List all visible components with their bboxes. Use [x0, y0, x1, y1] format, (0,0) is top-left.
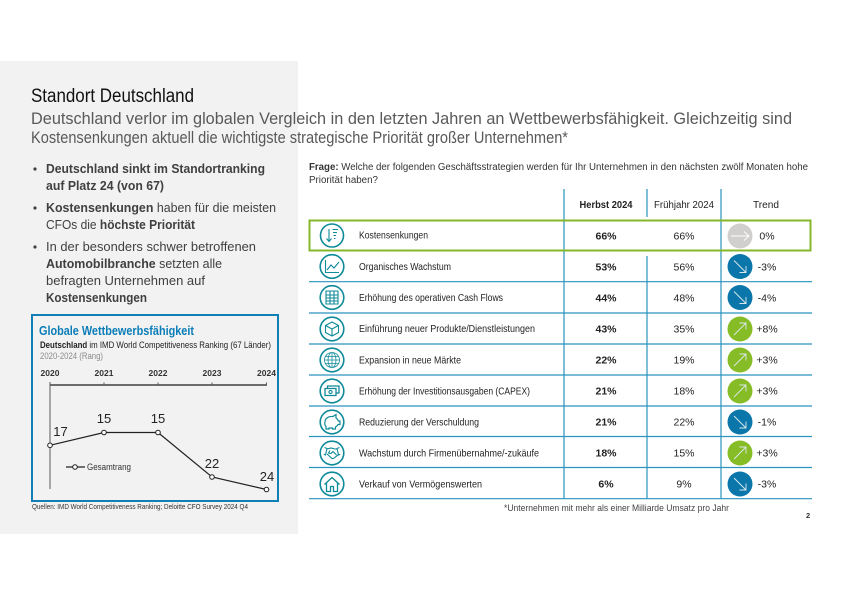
- bullet list: Kostensenkungen: [46, 290, 147, 305]
- trend arrow: down: [728, 254, 752, 279]
- year labels: 2022: [149, 368, 168, 378]
- trend arrow: neutral: [728, 224, 752, 248]
- row: Expansion in neue Märkte: Expansion in neue Märkte: [359, 354, 461, 366]
- subtitle: Deutschland verlor im globalen Vergleich in den letzten Jahren an Wettbewerbsfähigkeit. Gleichzeitig sind: [31, 110, 792, 128]
- table header: Frühjahr 2024: [654, 200, 714, 211]
- row: Einführung neuer Produkte/Dienstleistungen: 43%: [595, 324, 617, 336]
- title: Standort Deutschland: [31, 86, 194, 107]
- row: Erhöhung des operativen Cash Flows: 48%: [673, 292, 695, 304]
- trend arrow: down: [728, 285, 752, 310]
- icon: piggy bank: [320, 410, 344, 434]
- icon: house: [320, 472, 344, 496]
- row: Expansion in neue Märkte: 19%: [673, 354, 695, 366]
- data values: [53, 411, 274, 484]
- row: Kostensenkungen: 66%: [595, 230, 617, 242]
- data values: 24: [260, 469, 274, 484]
- row: Erhöhung der Investitionsausgaben (CAPEX): Erhöhung der Investitionsausgaben (CAPEX): [359, 386, 530, 398]
- icon: falling list: [320, 224, 344, 247]
- chart heading: Globale Wettbewerbsfähigkeit: [39, 323, 195, 338]
- row: Verkauf von Vermögenswerten: -3%: [758, 478, 776, 490]
- year labels: 2024: [257, 368, 276, 378]
- year labels: [41, 368, 276, 378]
- row: Erhöhung des operativen Cash Flows: -4%: [758, 292, 776, 304]
- footnote: *Unternehmen mit mehr als einer Milliarde Umsatz pro Jahr: [504, 503, 729, 514]
- row: Verkauf von Vermögenswerten: 9%: [676, 478, 692, 490]
- panel: Globale Wettbewerbsfähigkeit chart: [32, 315, 278, 501]
- trend arrow: down: [728, 472, 752, 496]
- year labels: 2021: [95, 368, 114, 378]
- row: Organisches Wachstum: 53%: [595, 262, 617, 274]
- row: Reduzierung der Verschuldung: 21%: [595, 416, 617, 428]
- row: Wachstum durch Firmenübernahme/-zukäufe: 18%: [595, 448, 617, 460]
- row: Expansion in neue Märkte: +3%: [756, 354, 778, 366]
- row: Organisches Wachstum: [320, 254, 776, 279]
- legend: [66, 462, 131, 472]
- row: Organisches Wachstum: 56%: [673, 262, 695, 274]
- table header: [580, 200, 779, 211]
- icon: globe: [320, 348, 344, 372]
- row: Kostensenkungen: Kostensenkungen: [359, 230, 428, 242]
- subtitle: [31, 110, 792, 147]
- table header: Herbst 2024: [580, 200, 633, 211]
- chart subtitle: Deutschland im IMD World Competitiveness Ranking (67 Länder): [40, 340, 271, 351]
- question text: [309, 162, 808, 186]
- trend arrow: up: [728, 316, 752, 342]
- row: Wachstum durch Firmenübernahme/-zukäufe: 15%: [673, 448, 695, 460]
- axes: [50, 382, 267, 489]
- bullet list: auf Platz 24 (von 67): [46, 178, 164, 193]
- trend arrow: up: [728, 440, 752, 466]
- legend: Gesamtrang: [87, 462, 131, 472]
- row: Organisches Wachstum: -3%: [758, 262, 776, 274]
- icon: handshake: [320, 441, 344, 465]
- row: Erhöhung der Investitionsausgaben (CAPEX): 21%: [595, 386, 617, 398]
- question text: Priorität haben?: [309, 175, 378, 186]
- data values: 15: [97, 411, 111, 426]
- bullet list: In der besonders schwer betroffenen: [46, 239, 256, 254]
- row: Erhöhung des operativen Cash Flows: 44%: [595, 292, 617, 304]
- row: Expansion in neue Märkte: [320, 348, 778, 372]
- year labels: 2020: [41, 368, 60, 378]
- row: Kostensenkungen: 0%: [759, 230, 775, 242]
- row: Reduzierung der Verschuldung: 22%: [673, 416, 695, 428]
- row: Verkauf von Vermögenswerten: [320, 472, 776, 496]
- data values: 22: [205, 456, 219, 471]
- row: Erhöhung der Investitionsausgaben (CAPEX): +3%: [756, 386, 778, 398]
- row: Wachstum durch Firmenübernahme/-zukäufe: Wachstum durch Firmenübernahme/-zukäufe: [359, 448, 539, 460]
- source note: Quellen: IMD World Competitiveness Ranking; Deloitte CFO Survey 2024 Q4: [32, 502, 248, 511]
- year labels: 2023: [203, 368, 222, 378]
- icon: abacus: [320, 286, 344, 309]
- subtitle: Kostensenkungen aktuell die wichtigste strategische Priorität großer Unternehmen*: [31, 129, 568, 147]
- icon: line chart: [320, 255, 344, 278]
- bullet list: Deutschland sinkt im Standortranking: [46, 161, 265, 176]
- icon: cube: [320, 317, 344, 341]
- icon: banknotes: [320, 379, 344, 403]
- row: Erhöhung der Investitionsausgaben (CAPEX): 18%: [673, 386, 695, 398]
- page number: 2: [806, 511, 810, 520]
- question text: Frage: Welche der folgenden Geschäftsstrategien werden für Ihr Unternehmen in den nächsten zwölf Monaten hohe: [309, 162, 808, 173]
- row: Einführung neuer Produkte/Dienstleistungen: 35%: [673, 324, 695, 336]
- highlight box: top row: [310, 220, 810, 250]
- row: Erhöhung des operativen Cash Flows: [320, 285, 776, 310]
- row: Verkauf von Vermögenswerten: Verkauf von Vermögenswerten: [359, 478, 482, 490]
- trend arrow: up: [728, 348, 752, 372]
- row: Reduzierung der Verschuldung: [320, 410, 776, 434]
- bullet list: befragten Unternehmen auf: [46, 273, 205, 288]
- row: Einführung neuer Produkte/Dienstleistungen: [320, 316, 778, 342]
- trend arrow: up: [728, 378, 752, 404]
- bullet list: CFOs die höchste Priorität: [46, 217, 196, 232]
- bullet list: [33, 161, 276, 305]
- table grid: [309, 189, 812, 499]
- bullet list: Kostensenkungen haben für die meisten: [46, 200, 276, 215]
- row: Wachstum durch Firmenübernahme/-zukäufe: [320, 440, 778, 466]
- line series: Gesamtrang: [48, 430, 269, 492]
- table header: Trend: [753, 200, 779, 211]
- row: Kostensenkungen: [320, 224, 775, 248]
- row: Wachstum durch Firmenübernahme/-zukäufe: +3%: [756, 448, 778, 460]
- bullet list: Automobilbranche setzten alle: [46, 256, 222, 271]
- chart unit: 2020-2024 (Rang): [40, 351, 103, 361]
- data values: 15: [151, 411, 165, 426]
- row: Erhöhung der Investitionsausgaben (CAPEX): [320, 378, 778, 404]
- row: Reduzierung der Verschuldung: Reduzierung der Verschuldung: [359, 416, 479, 428]
- row: Expansion in neue Märkte: 22%: [595, 354, 617, 366]
- background panel: left grey: [0, 61, 298, 534]
- row: Verkauf von Vermögenswerten: 6%: [598, 478, 614, 490]
- row: Einführung neuer Produkte/Dienstleistungen: Einführung neuer Produkte/Dienstleistungen: [359, 323, 535, 335]
- row: Reduzierung der Verschuldung: -1%: [758, 416, 776, 428]
- row: Einführung neuer Produkte/Dienstleistungen: +8%: [756, 324, 778, 336]
- data values: 17: [53, 424, 68, 439]
- row: Erhöhung des operativen Cash Flows: Erhöhung des operativen Cash Flows: [359, 292, 503, 304]
- row: Kostensenkungen: 66%: [673, 230, 695, 242]
- trend arrow: down: [728, 410, 752, 434]
- row: Organisches Wachstum: Organisches Wachstum: [359, 261, 451, 273]
